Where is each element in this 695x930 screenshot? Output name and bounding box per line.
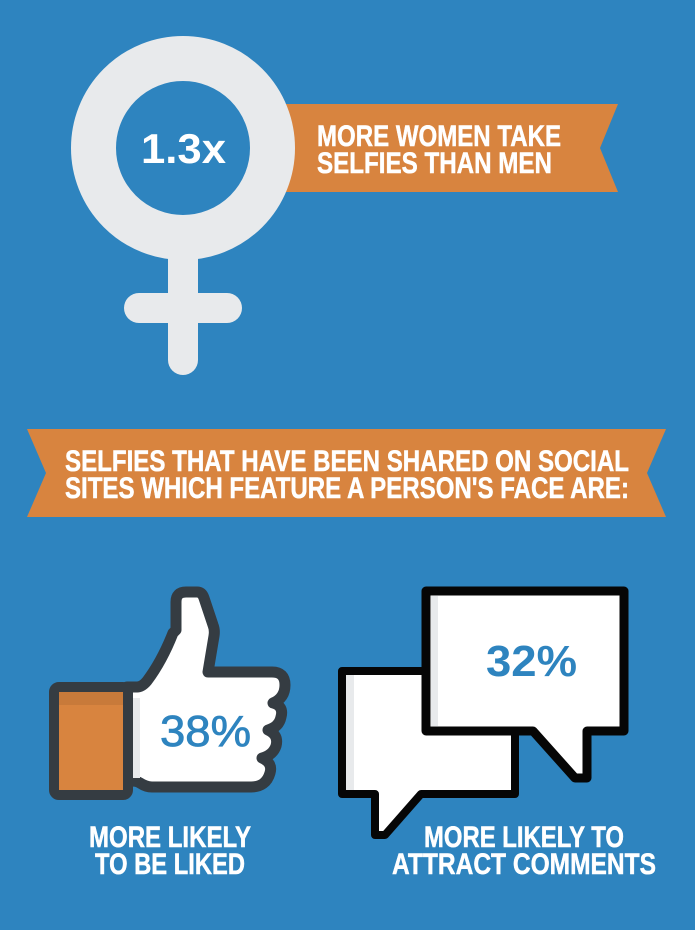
- icon: front speech bubble 32%: 32%: [486, 637, 577, 686]
- icon: female symbol with 1.3x: [94, 58, 272, 375]
- ribbon: more women take selfies: SELFIES THAN MEN: [317, 147, 552, 180]
- ribbon: more women take selfies: MORE WOMEN TAKE: [317, 120, 561, 153]
- label: more likely to attract comments: [392, 821, 656, 881]
- icon: front speech bubble 32%: [426, 591, 624, 778]
- label: more likely to attract comments: MORE LIKELY TO: [424, 821, 624, 854]
- icon: back speech bubble: [342, 671, 515, 835]
- ribbon: selfies shared on social sites: [27, 429, 666, 517]
- icon: thumbs up 38%: 38%: [160, 707, 251, 756]
- label: more likely to be liked: TO BE LIKED: [95, 848, 245, 881]
- label: more likely to be liked: MORE LIKELY: [89, 821, 251, 854]
- icon: thumbs up 38%: [54, 592, 285, 795]
- ribbon: more women take selfies: [270, 104, 618, 192]
- icon: female symbol with 1.3x: 1.3x: [141, 125, 227, 172]
- label: more likely to be liked: [89, 821, 251, 881]
